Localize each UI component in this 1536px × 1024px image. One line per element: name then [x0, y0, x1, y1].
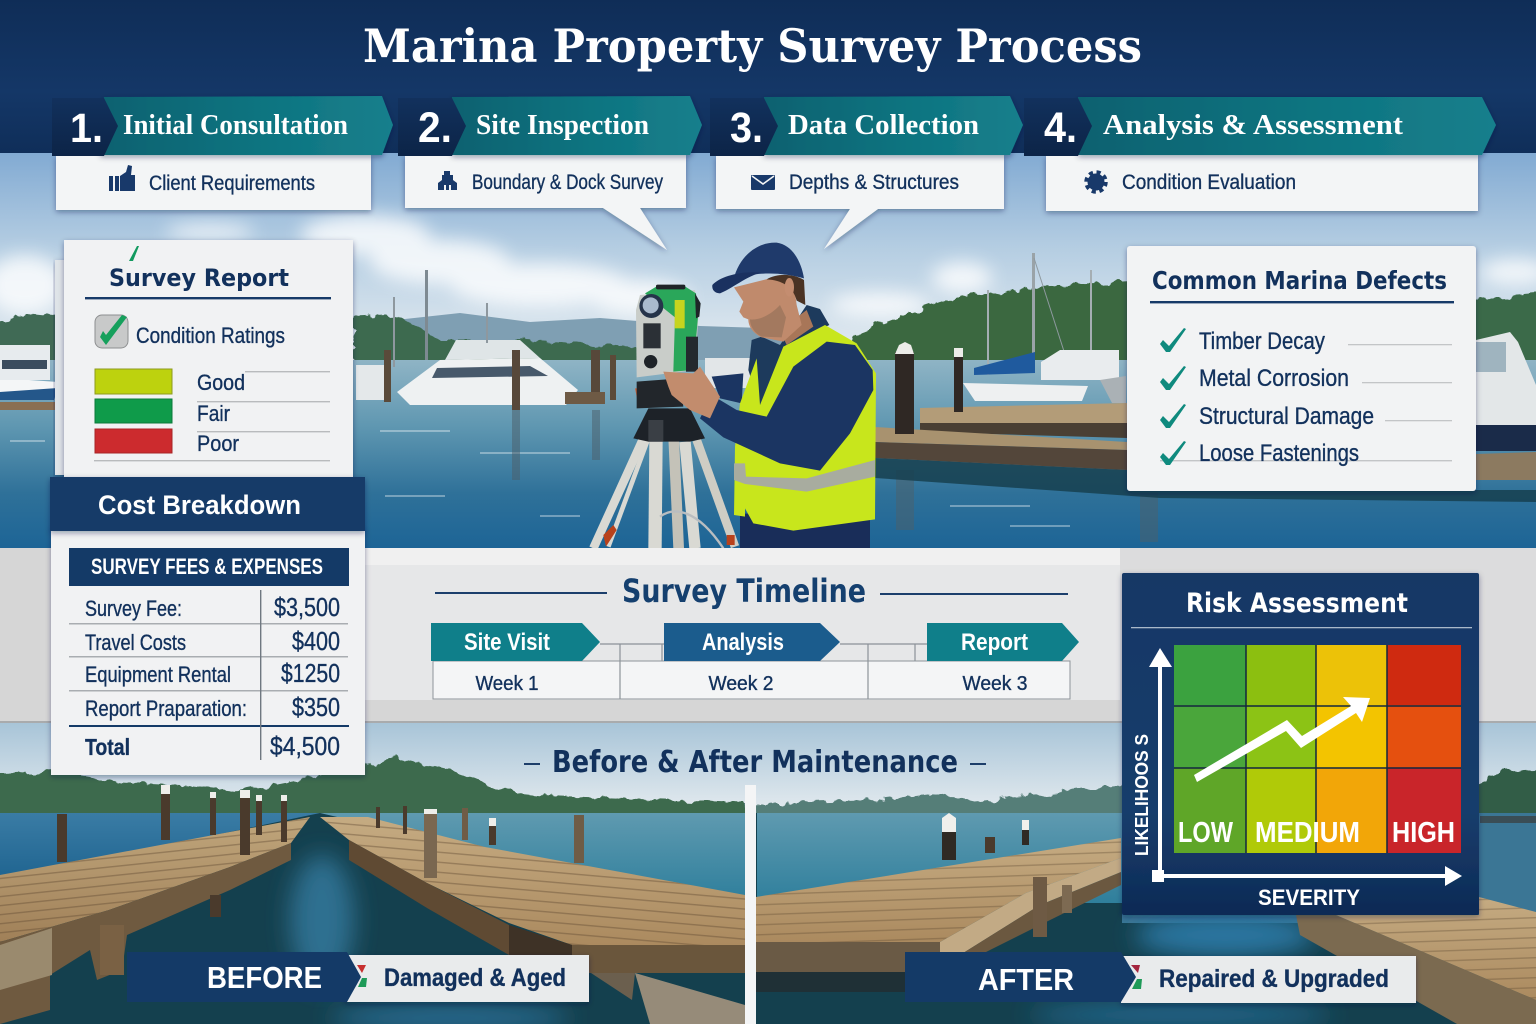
panel: risk assessment: Risk Assessment [1186, 588, 1408, 619]
header band [0, 0, 1536, 153]
cost table: $1250 [281, 658, 340, 688]
step 4: analysis and assessment: Condition Evaluation [1122, 171, 1296, 194]
step 4: analysis and assessment: Analysis & Assessment [1103, 110, 1404, 141]
survey timeline: Survey Timeline [622, 572, 866, 610]
timeline table: Week 3 [962, 673, 1028, 695]
risk matrix: LOW [1178, 817, 1234, 849]
defect checklist: Timber Decay [1199, 328, 1325, 355]
step 1: initial consultation: Client Requirements [149, 172, 315, 195]
step 4: analysis and assessment: 4. [1044, 104, 1077, 152]
arrow: report [927, 623, 1079, 661]
rating legend: Poor [197, 431, 239, 456]
step 2: site inspection: 2. [418, 104, 452, 152]
icon: gear [1086, 172, 1106, 192]
arrow: report: Report [961, 629, 1028, 656]
panel: cost breakdown: Cost Breakdown [98, 490, 301, 520]
right wooden pier [875, 342, 1127, 470]
cost table [69, 590, 349, 761]
after label: AFTER [978, 962, 1074, 997]
cost table: Total [85, 734, 130, 760]
before label [127, 952, 589, 1002]
left moored boat [0, 345, 60, 410]
panel: common marina defects [1127, 246, 1476, 491]
lower photo sky, hills and water [0, 720, 1536, 1024]
before label: BEFORE [207, 960, 322, 995]
cost table: $350 [292, 692, 340, 722]
arrow: analysis: Analysis [702, 629, 784, 656]
panel: common marina defects: Common Marina Defects [1152, 266, 1447, 295]
defect checklist: Metal Corrosion [1199, 365, 1349, 392]
before label: Damaged & Aged [384, 964, 566, 992]
panel: cost breakdown: SURVEY FEES & EXPENSES [91, 554, 323, 579]
after label: Repaired & Upgraded [1159, 965, 1389, 993]
surveyor with total station [593, 243, 876, 550]
cost table: Report Praparation: [85, 696, 247, 721]
right large boat [1476, 332, 1536, 480]
step 2: site inspection [398, 96, 702, 250]
panel: cost breakdown [50, 477, 365, 775]
step 2: site inspection: Boundary & Dock Survey [472, 171, 663, 194]
risk matrix: MEDIUM [1255, 817, 1360, 849]
icon: condition check [95, 315, 128, 348]
timeline table [433, 661, 1070, 699]
cost table: $4,500 [270, 731, 340, 761]
cost table: Survey Fee: [85, 596, 182, 621]
step 1: initial consultation: Initial Consultation [123, 110, 348, 141]
arrow: site visit: Site Visit [464, 629, 550, 656]
step 1: initial consultation [52, 96, 393, 210]
check accent [129, 246, 139, 261]
cost table: $3,500 [274, 592, 340, 622]
before dock photo [0, 785, 745, 1024]
step 3: data collection: 3. [730, 104, 763, 152]
survey timeline [431, 572, 1079, 699]
icon: thumbs up [109, 165, 135, 191]
step 2: site inspection: Site Inspection [476, 110, 649, 141]
panel: survey report [55, 240, 353, 480]
panel: survey report: Condition Ratings [136, 323, 285, 348]
cost table: $400 [292, 626, 340, 656]
defect checklist: Loose Fastenings [1199, 440, 1359, 467]
risk axes: SEVERITY [1258, 885, 1360, 910]
before and after heading: Before & After Maintenance [552, 745, 958, 780]
timeline table: Week 1 [476, 673, 538, 695]
risk matrix: HIGH [1392, 817, 1455, 849]
cost table: Equipment Rental [85, 662, 231, 687]
gray timeline band [0, 548, 1536, 723]
risk axes: LIKELIHOOS S [1132, 734, 1152, 856]
rating legend [94, 369, 330, 461]
title: Marina Property Survey Process [363, 19, 1142, 73]
step 3: data collection: Depths & Structures [789, 171, 959, 194]
step 1: initial consultation: 1. [70, 105, 103, 151]
defect checklist [1160, 328, 1374, 467]
motor yacht [356, 270, 616, 410]
step 3: data collection: Data Collection [788, 110, 979, 141]
after dock photo [756, 813, 1536, 1024]
before and after divider [745, 785, 756, 1024]
timeline table: Week 2 [708, 673, 774, 695]
after label [905, 952, 1416, 1003]
step 3: data collection [710, 96, 1023, 249]
icon: envelope [751, 175, 775, 190]
rating legend: Good [197, 370, 245, 395]
icon: building [438, 171, 457, 190]
defect checklist: Structural Damage [1199, 403, 1374, 430]
panel: survey report: Survey Report [109, 264, 289, 292]
right sailboats [705, 253, 1126, 403]
step 4: analysis and assessment [1024, 97, 1496, 211]
arrow: analysis [664, 623, 840, 661]
cost table: Travel Costs [85, 630, 186, 655]
arrow: site visit [431, 623, 600, 661]
risk matrix [1174, 645, 1461, 853]
rating legend: Fair [197, 401, 230, 426]
risk axes [1132, 648, 1462, 910]
panel: risk assessment [1122, 573, 1479, 915]
arrow: risk trend [1194, 697, 1370, 782]
